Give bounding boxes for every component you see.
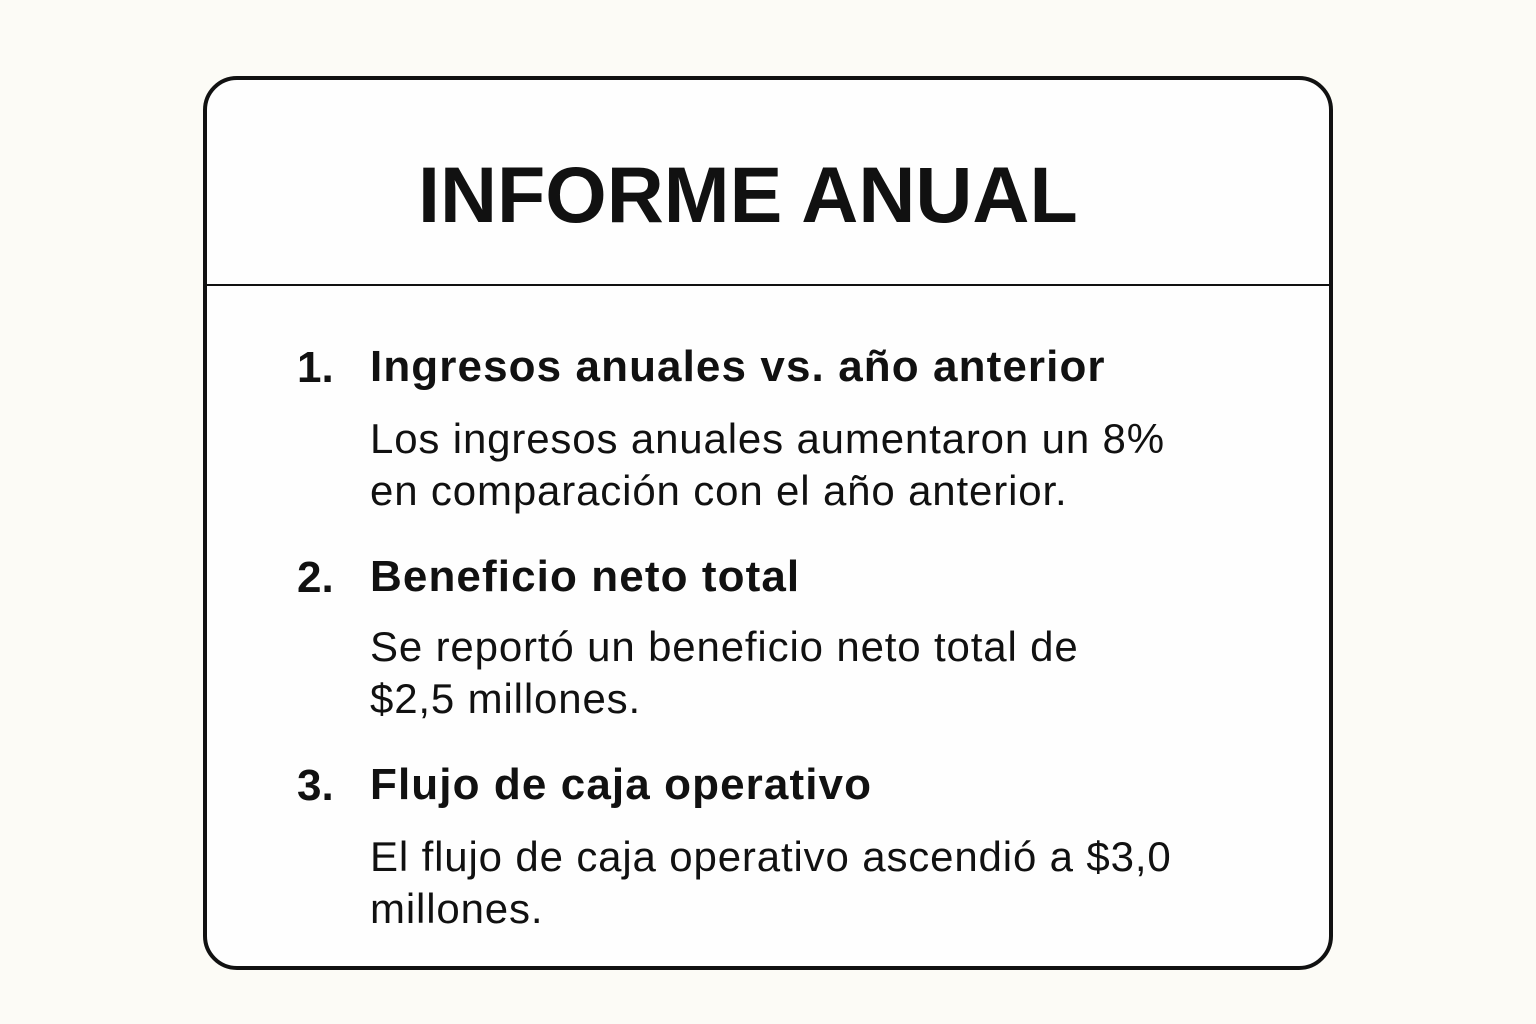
number 3: 3. [297,761,334,810]
item 3 [297,760,1172,932]
item 2 [297,552,1079,722]
body 1 [370,415,1165,514]
body 2: Se reportó un beneficio neto total de [370,623,1079,670]
title: INFORME ANUAL [418,150,1078,239]
heading 1: Ingresos anuales vs. año anterior [370,342,1106,391]
body 1: en comparación con el año anterior. [370,467,1068,514]
body 3: millones. [370,885,543,932]
panel: annual report card [203,76,1333,970]
body 1: Los ingresos anuales aumentaron un 8% [370,415,1165,462]
heading 3: Flujo de caja operativo [370,760,872,809]
number 2: 2. [297,553,334,602]
body 2 [370,623,1079,722]
number 1: 1. [297,343,334,392]
item 1 [297,342,1165,514]
body 3: El flujo de caja operativo ascendió a $3,0 [370,833,1172,880]
body 2: $2,5 millones. [370,675,641,722]
body 3 [370,833,1172,932]
heading 2: Beneficio neto total [370,552,800,601]
